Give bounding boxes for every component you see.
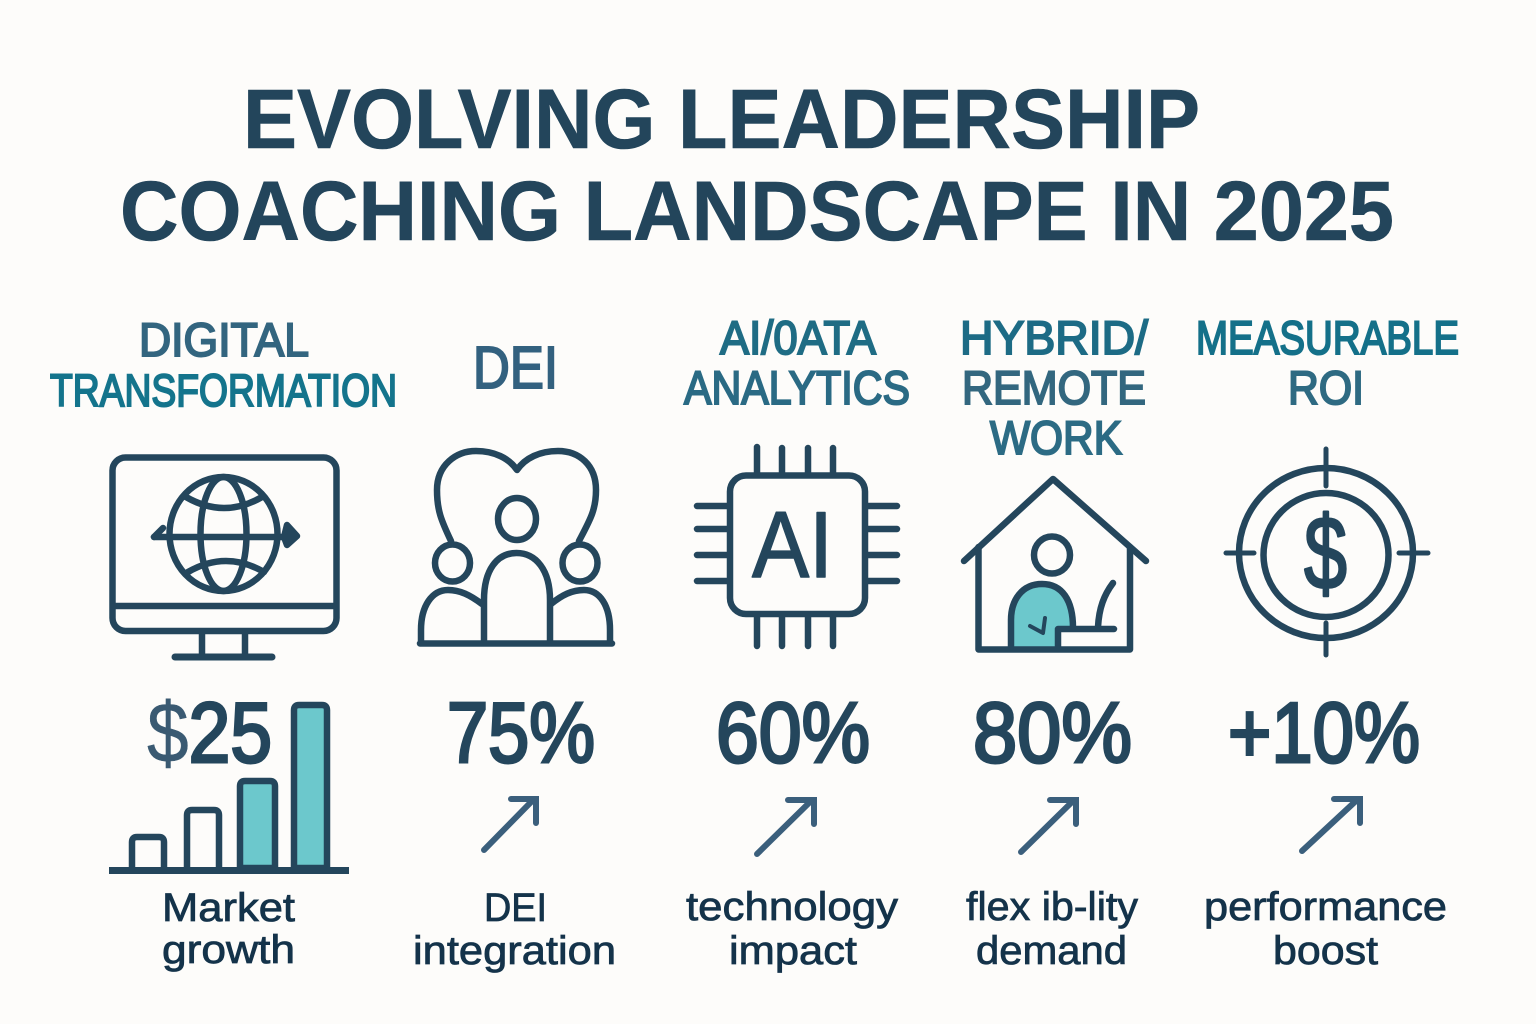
label: market growth [162, 886, 295, 972]
heading: AI/0ATA analytics: AI/0ATA [720, 311, 877, 364]
heading: hybrid remote work: HYBRID/ [960, 311, 1149, 364]
panel: DEI [413, 335, 616, 973]
heading: measurable ROI [1196, 311, 1459, 414]
label: performance boost: performance [1204, 885, 1447, 929]
heading: digital transformation [50, 313, 397, 416]
icon: dollar target: $ [1304, 496, 1347, 612]
heading: AI/0ATA analytics: ANALYTICS [684, 361, 910, 414]
arrow: up right [1021, 800, 1076, 852]
icon: AI chip [697, 447, 897, 646]
icon: person working at home [964, 479, 1146, 650]
heading: hybrid remote work: REMOTE [962, 361, 1146, 414]
stat: 80%: 80% [973, 686, 1132, 781]
label: technology impact: impact [729, 929, 857, 973]
label: flexibility demand [966, 885, 1138, 973]
stat: 60%: 60% [716, 686, 870, 781]
bar chart: market growth [109, 705, 349, 870]
heading: digital transformation: TRANSFORMATION [50, 365, 397, 416]
panel: measurable ROI [1196, 311, 1459, 973]
label: market growth: Market [162, 886, 295, 930]
arrow: up right [757, 800, 814, 854]
panel: AI and data analytics [684, 311, 910, 973]
heading: measurable ROI: ROI [1288, 361, 1364, 414]
panel: digital transformation [50, 313, 397, 972]
label: performance boost [1204, 885, 1447, 973]
title: COACHING LANDSCAPE IN 2025 [120, 164, 1394, 258]
label: flexibility demand: demand [976, 929, 1127, 973]
heading: hybrid remote work [960, 311, 1149, 464]
label: technology impact: technology [686, 885, 898, 929]
heading: digital transformation: DIGITAL [139, 313, 309, 366]
heading: measurable ROI: MEASURABLE [1196, 311, 1459, 364]
heading: AI/0ATA analytics [684, 311, 910, 414]
arrow: up right [1302, 799, 1360, 851]
heading: hybrid remote work: WORK [990, 411, 1122, 464]
stat: +10%: +10% [1228, 686, 1420, 781]
label: market growth: growth [162, 928, 295, 972]
icon: dollar target [1226, 449, 1428, 655]
icon: monitor with globe [112, 458, 336, 657]
title: EVOLVING LEADERSHIP [243, 72, 1200, 166]
stat: $25: $25 [147, 686, 272, 781]
label: DEI integration: DEI [484, 886, 547, 930]
icon: AI chip: AI [752, 492, 833, 597]
label: DEI integration [413, 886, 616, 973]
arrow: up right [484, 799, 536, 850]
stat: 75%: 75% [447, 686, 595, 781]
label: DEI integration: integration [413, 929, 616, 973]
panel: hybrid remote work [960, 311, 1149, 973]
label: flexibility demand: flex ib-lity [966, 885, 1138, 929]
title [120, 72, 1394, 258]
heading: DEI: DEI [473, 335, 558, 401]
label: performance boost: boost [1273, 929, 1378, 973]
icon: heart and people [420, 451, 612, 644]
label: technology impact [686, 885, 898, 973]
